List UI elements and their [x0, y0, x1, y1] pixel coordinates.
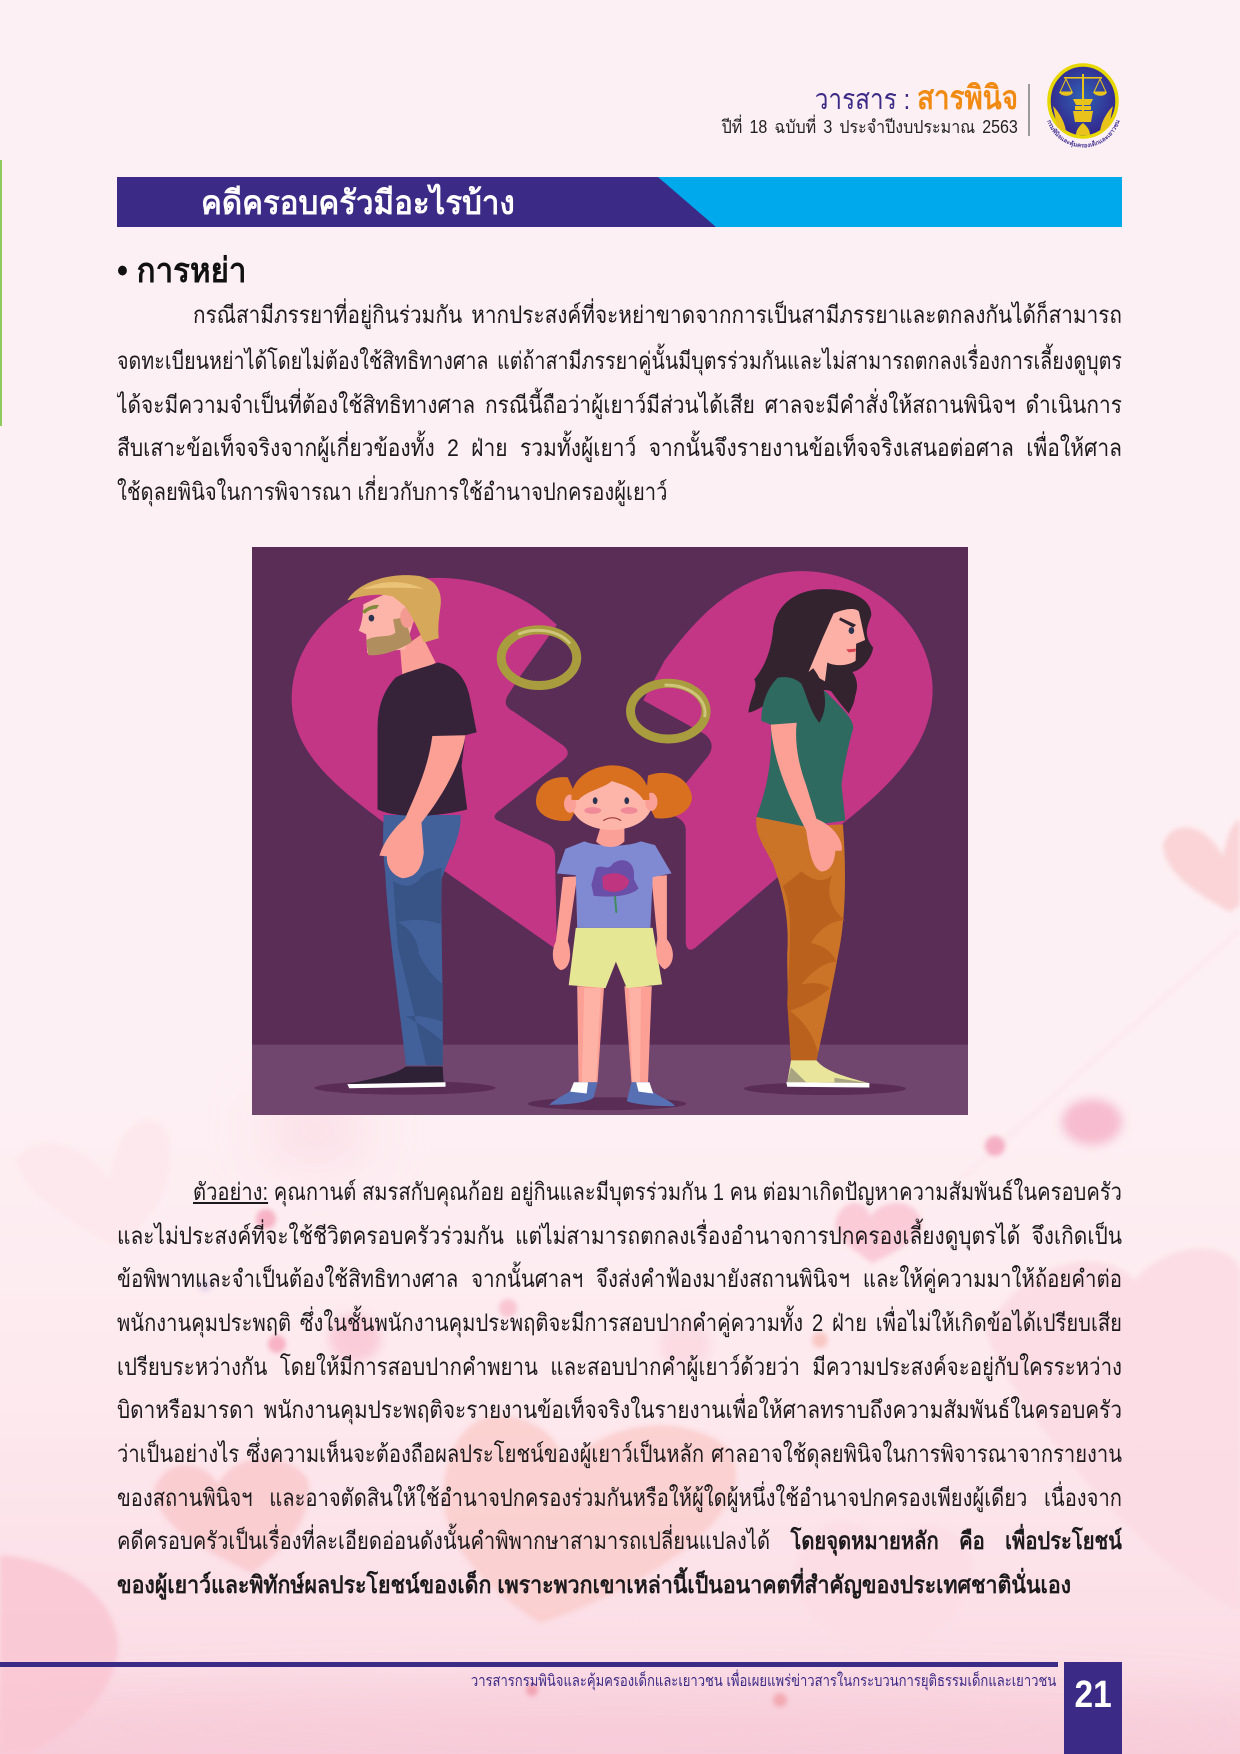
upper small heart [835, 1203, 922, 1263]
floor shadows [314, 1081, 906, 1110]
page number: 21 [1074, 1674, 1112, 1716]
page number [1064, 1662, 1122, 1754]
broken heart [292, 571, 933, 950]
icon: department emblem: กรมพินิจและคุ้มครองเด็กและเยาวชน [1047, 120, 1120, 148]
journal name: วารสาร : สารพินิจ [815, 79, 1018, 116]
text block: example case [117, 1178, 1122, 1600]
text block: example case: ของสถานพินิจฯ และอาจตัดสินให้ใช้อำนาจปกครองร่วมกันหรือให้ผู้ใดผู้หนึ่งใช้อำนาจปกครองเพียงผู้เดียว เนื่องจาก [117, 1485, 1122, 1512]
text block: divorce paragraph: กรณีสามีภรรยาที่อยู่กินร่วมกัน หากประสงค์ที่จะหย่าขาดจากการเป็นสามีภรรยาและตกลงกันได้ก็สามารถ [193, 302, 1122, 329]
right edge heart [1163, 820, 1240, 912]
section title banner [117, 177, 1122, 227]
faint hearts [16, 1120, 170, 1245]
left green edge line [0, 160, 2, 426]
text block: example case: บิดาหรือมารดา พนักงานคุมประพฤติจะรายงานข้อเท็จจริงในรายงานเพื่อให้ศาลทราบถึงความสัมพันธ์ในครอบครัว [117, 1397, 1122, 1424]
footer rule [0, 1662, 1058, 1667]
small heart [154, 1458, 309, 1573]
rings [501, 630, 706, 739]
text block: divorce paragraph: ได้จะมีความจำเป็นที่ต้องใช้สิทธิทางศาล กรณีนี้ถือว่าผู้เยาว์มีส่วนได้เสีย ศาลจะมีคำสั่งให้สถานพินิจฯ ดำเนินการ [117, 392, 1122, 419]
text block: divorce paragraph: จดทะเบียนหย่าได้โดยไม่ต้องใช้สิทธิทางศาล แต่ถ้าสามีภรรยาคู่นั้นมีบุตรร่วมกันและไม่สามารถตกลงเรื่องการเลี้ยงดูบุตร [117, 348, 1122, 375]
footer text: วารสารกรมพินิจและคุ้มครองเด็กและเยาวชน เพื่อเผยแพร่ข่าวสารในกระบวนการยุติธรรมเด็กและเยาวชน [471, 1673, 1056, 1690]
banner title: คดีครอบครัวมีอะไรบ้าง [201, 184, 515, 221]
banner dark shape [117, 177, 716, 227]
illustration: family split by a broken heart [252, 547, 968, 1115]
text block: example case: ข้อพิพาทและจำเป็นต้องใช้สิทธิทางศาล จากนั้นศาลฯ จึงส่งคำฟ้องมายังสถานพินิจฯ และให้คู่ความมาให้ถ้อยคำต่อ [117, 1266, 1122, 1293]
text block: divorce paragraph [117, 298, 1122, 506]
text block: example case: ของผู้เยาว์และพิทักษ์ผลประโยชน์ของเด็ก เพราะพวกเขาเหล่านี้เป็นอนาคตที่สำคัญของประเทศชาตินั่นเอง [117, 1572, 1071, 1599]
woman [749, 589, 873, 1088]
icon: department emblem [1047, 63, 1120, 148]
man [347, 575, 477, 1088]
journal masthead [722, 79, 1018, 137]
faint diagonal strand [960, 930, 1240, 1180]
text block: divorce paragraph: สืบเสาะข้อเท็จจริงจากผู้เกี่ยวข้องทั้ง 2 ฝ่าย รวมทั้งผู้เยาว์ จากนั้นจึงรายงานข้อเท็จจริงเสนอต่อศาล เพื่อให้ศาล [117, 435, 1122, 462]
text block: example case: และไม่ประสงค์ที่จะใช้ชีวิตครอบครัวร่วมกัน แต่ไม่สามารถตกลงเรื่องอำนาจการปกครองเลี้ยงดูบุตรได้ จึงเกิดเป็น [117, 1223, 1122, 1250]
child [536, 765, 692, 1106]
text block: example case: ตัวอย่าง: คุณกานต์ สมรสกับคุณก้อย อยู่กินและมีบุตรร่วมกัน 1 คน ต่อมาเกิดปัญหาความสัมพันธ์ในครอบครัว [193, 1179, 1122, 1206]
text block: example case: เปรียบระหว่างกัน โดยให้มีการสอบปากคำพยาน และสอบปากคำผู้เยาว์ด้วยว่า มีความประสงค์จะอยู่กับใครระหว่าง [117, 1354, 1122, 1381]
text block: example case: คดีครอบครัวเป็นเรื่องที่ละเอียดอ่อนดังนั้นคำพิพากษาสามารถเปลี่ยนแปลงได้ โดยจุดหมายหลัก คือ เพื่อประโยชน์ [117, 1528, 1122, 1555]
text block: example case: พนักงานคุมประพฤติ ซึ่งในชั้นพนักงานคุมประพฤติจะมีการสอบปากคำคู่ความทั้ง 2 ฝ่าย เพื่อไม่ให้เกิดข้อได้เปรียบเสีย [117, 1310, 1122, 1337]
text block: example case: ว่าเป็นอย่างไร ซึ่งความเห็นจะต้องถือผลประโยชน์ของผู้เยาว์เป็นหลัก ศาลอาจใช้ดุลยพินิจในการพิจารณาจากรายงาน [117, 1441, 1122, 1468]
issue line: ปีที่ 18 ฉบับที่ 3 ประจำปีงบประมาณ 2563 [722, 117, 1018, 137]
heading: divorce: • การหย่า [117, 252, 246, 290]
lower-left heart [0, 1555, 118, 1754]
masthead divider [1028, 84, 1030, 136]
big peach heart [443, 1415, 736, 1623]
text block: divorce paragraph: ใช้ดุลยพินิจในการพิจารณา เกี่ยวกับการใช้อำนาจปกครองผู้เยาว์ [117, 479, 667, 506]
